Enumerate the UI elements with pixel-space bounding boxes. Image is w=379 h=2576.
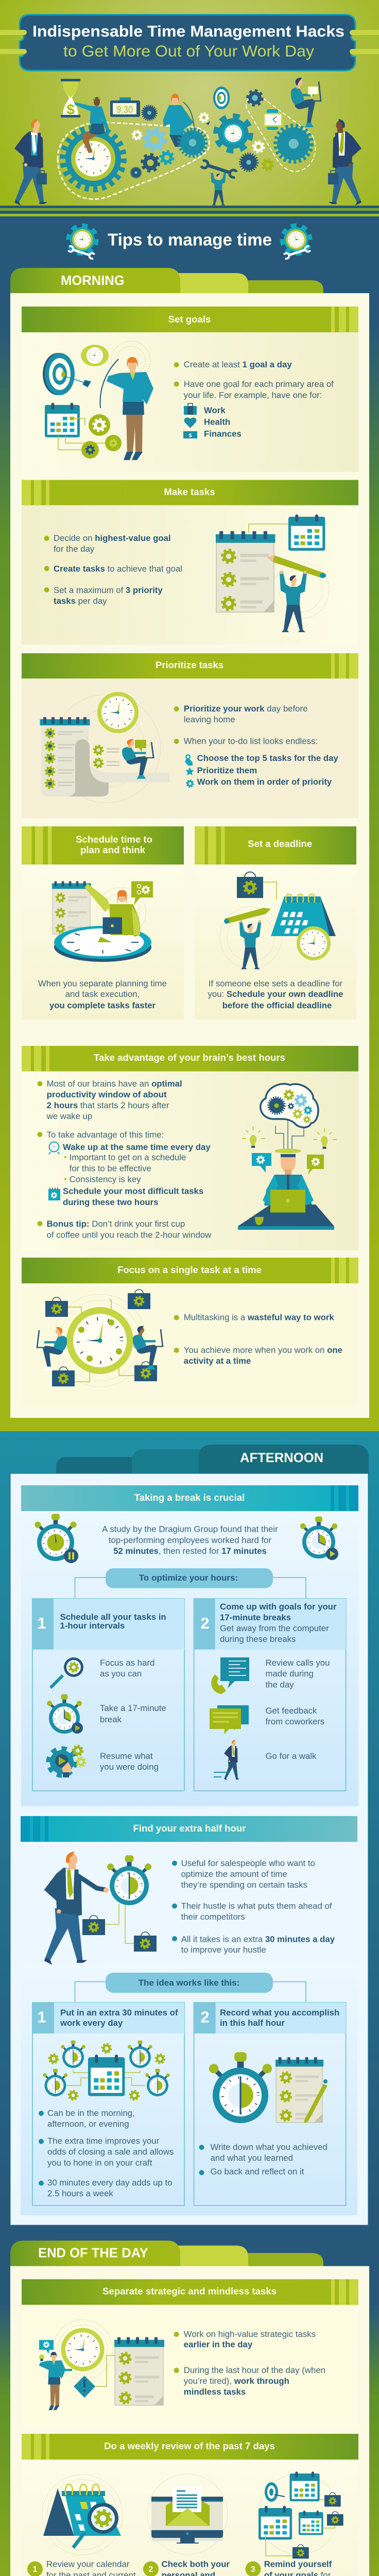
box 1: schedule tasks: 1 — [37, 1614, 46, 1632]
title banner: to Get More Out of Your Work Day — [63, 42, 315, 60]
morning tabs — [10, 268, 323, 293]
icon: finance bill: $ — [189, 433, 192, 439]
heading bar: make tasks: Make tasks — [164, 486, 215, 497]
illustration: businessman, stopwatch and bags — [44, 1852, 157, 1965]
illustration: calendar with stopwatches — [43, 2040, 170, 2100]
heading bar: break: Taking a break is crucial — [134, 1492, 245, 1503]
heading bar: set a deadline: Set a deadline — [248, 838, 312, 849]
illustration: stopwatch gear — [216, 116, 250, 150]
box 2: record accomplishments — [194, 2002, 346, 2206]
illustration: seated woman with hourglass — [74, 97, 109, 153]
step 3 text — [245, 2560, 349, 2576]
text: task bullets: for the day — [54, 544, 95, 554]
title banner — [0, 14, 379, 71]
text: deadline note: before the official deadline — [222, 1001, 332, 1010]
heading bar: focus: Focus on a single task at a time — [117, 1264, 262, 1275]
text: half hour bullets: Their hustle is what puts them ahead of — [181, 1901, 332, 1911]
text: schedule note: you complete tasks faster — [49, 1001, 156, 1010]
illustration: woman on clock with laptop — [52, 881, 153, 962]
illustration: woman, clock, alert and checklist — [39, 2320, 164, 2410]
heading bar: set goals: Set goals — [168, 314, 211, 325]
text: brain bullets: Schedule your most difficult tasks — [63, 1186, 203, 1196]
heading bar: prioritize tasks: Prioritize tasks — [156, 659, 223, 670]
afternoon tabs: AFTERNOON — [240, 1451, 323, 1465]
text: half hour bullets: they’re spending on certain tasks — [181, 1880, 307, 1890]
text: box 2 bullets: Go back and reflect on it — [210, 2167, 304, 2177]
heading bar: half hour — [21, 1816, 357, 1842]
box 1: schedule tasks: Resume what — [100, 1751, 153, 1761]
illustration: hourglass: $ — [66, 101, 75, 117]
panel: brain best hours — [22, 1046, 358, 1250]
panel: separate strategic and mindless tasks — [22, 2279, 358, 2427]
text: brain bullets: Wake up at the same time every day — [63, 1142, 211, 1152]
heading bar: focus — [22, 1258, 358, 1283]
text: focus bullets: You achieve more when you work on one — [184, 1345, 342, 1355]
box 2: record accomplishments: in this half hour — [220, 2018, 285, 2028]
text: task bullets: Create tasks to achieve that goal — [54, 564, 182, 574]
afternoon panel — [10, 1473, 368, 2225]
heading bar: separate tasks — [22, 2279, 358, 2305]
title banner: Indispensable Time Management Hacks — [32, 23, 344, 40]
text: goal bullets — [174, 360, 334, 439]
box 2: goals for breaks: Review calls you — [266, 1658, 330, 1668]
icon: stopwatch — [47, 1694, 83, 1734]
pill: to optimize your hours: To optimize your hours: — [139, 1573, 238, 1583]
illustration: brain, head and laptop — [238, 1084, 337, 1230]
text: box 1 bullets: 2.5 hours a week — [47, 2189, 113, 2198]
illustration: digital clock — [110, 97, 140, 117]
text: brain bullets — [37, 1079, 212, 1240]
pill: to optimize your hours — [75, 1568, 306, 1598]
text: focus bullets: Multitasking is a wasteful way to work — [184, 1313, 334, 1323]
box 1: schedule tasks: Focus as hard — [100, 1658, 154, 1668]
box 2: record accomplishments: Record what you accomplish — [220, 2008, 339, 2018]
box 1: extra 30 minutes: 1 — [37, 2008, 46, 2026]
text: separate tasks bullets — [174, 2329, 325, 2397]
illustration: small gears — [131, 91, 312, 178]
icon: gear with play button — [48, 1745, 85, 1777]
text: task bullets: Decide on highest-value goal — [54, 533, 171, 543]
step 2 text: Check both your — [162, 2560, 230, 2569]
illustration: target and woman archer — [43, 341, 153, 460]
box 2: goals for breaks: from coworkers — [266, 1717, 324, 1726]
box 1: schedule tasks: Take a 17-minute — [100, 1703, 166, 1713]
box 2: goals for breaks: made during — [266, 1669, 314, 1679]
box 2: goals for breaks: Go for a walk — [266, 1751, 317, 1761]
end of the day section background — [0, 2236, 379, 2576]
text: prioritize bullets: Choose the top 5 tasks for the day — [197, 753, 338, 763]
text: separate tasks bullets: you’re tired), work through — [184, 2376, 289, 2386]
heading bar: weekly review — [22, 2434, 358, 2460]
panel: focus on a single task — [22, 1258, 358, 1406]
morning panel — [10, 293, 369, 1418]
text: brain bullets: Important to get on a schedule — [70, 1153, 186, 1162]
text: box 1 bullets: you to hone in on your craft — [47, 2158, 152, 2168]
text: box 1 bullets — [39, 2108, 174, 2198]
illustration: monitor with email — [147, 2474, 228, 2554]
illustration: man lifting wrench — [201, 160, 237, 206]
text: goal bullets: Health — [204, 417, 230, 427]
header section — [0, 0, 379, 216]
pill: the idea works like this: The idea works like this: — [139, 1978, 239, 1988]
text: half hour bullets: to improve your hustle — [181, 1945, 266, 1955]
box 2: record accomplishments: 2 — [200, 2008, 210, 2026]
box 1: schedule tasks: break — [100, 1715, 122, 1724]
box 2: goals for breaks: Get feedback — [266, 1706, 317, 1716]
step 1 text: Review your calendar — [46, 2560, 130, 2569]
text: prioritize bullets: Prioritize them — [197, 766, 257, 775]
text: study: top-performing employees worked hard for — [109, 1535, 272, 1545]
text: brain bullets: productivity window of about — [47, 1090, 167, 1099]
icon: star — [185, 767, 194, 775]
text: study — [102, 1524, 278, 1556]
illustration: wrist clock — [263, 109, 283, 130]
text: separate tasks bullets: earlier in the day — [184, 2340, 253, 2349]
text: focus bullets — [174, 1313, 342, 1366]
text: half hour bullets: their competitors — [181, 1912, 245, 1922]
illustration: hourglass — [61, 79, 80, 117]
end of day tabs — [10, 2241, 323, 2266]
text: task bullets: tasks per day — [54, 596, 107, 606]
icon: phone and list — [211, 1657, 249, 1694]
illustration: archer woman — [163, 94, 194, 147]
illustration: scroll list with clock and man — [40, 692, 169, 803]
heading bar: make tasks — [22, 480, 358, 505]
heading: tips to manage time: Tips to manage time — [108, 230, 272, 249]
box 1: extra 30 minutes: Put in an extra 30 minutes of — [60, 2008, 178, 2018]
box 1: schedule tasks — [32, 1598, 184, 1791]
panel: set a deadline — [195, 826, 356, 1020]
text: brain bullets: Bonus tip: Don’t drink your first cup — [47, 1219, 185, 1229]
heading bar: set goals — [22, 307, 358, 332]
icon: alarm clock — [48, 1142, 60, 1154]
morning section background — [0, 216, 379, 1431]
illustration: big clock, bags and two workers — [37, 1290, 163, 1387]
text: half hour bullets: optimize the amount of time — [181, 1869, 287, 1879]
text: focus bullets: activity at a time — [184, 1356, 251, 1366]
illustration: left businessman — [14, 119, 47, 206]
text: task bullets — [44, 533, 182, 606]
panel: set goals — [22, 307, 358, 472]
illustration: right businessman — [328, 119, 361, 206]
text: half hour bullets: All it takes is an extra 30 minutes a day — [181, 1934, 335, 1944]
text: goal bullets: Work — [204, 405, 226, 415]
text: brain bullets: we wake up — [46, 1111, 92, 1121]
text: prioritize bullets: Work on them in order of priority — [197, 777, 332, 787]
text: brain bullets: Most of our brains have an optimal — [47, 1079, 182, 1089]
illustration: dashed belts — [58, 96, 315, 199]
text: brain bullets: of coffee until you reach the 2-hour window — [47, 1230, 212, 1240]
icon: gear — [186, 780, 194, 787]
text: prioritize bullets: When your to-do list looks endless: — [184, 736, 318, 746]
text: deadline note: you: Schedule your own deadline — [208, 989, 343, 999]
text: brain bullets: Consistency is key — [70, 1175, 141, 1184]
box 2: goals for breaks: 2 — [200, 1614, 210, 1632]
icon: chat bubbles — [210, 1705, 249, 1734]
panel: weekly review — [22, 2434, 358, 2576]
panel: make tasks — [22, 480, 358, 645]
text: half hour bullets: Useful for salespeople who want to — [181, 1858, 315, 1868]
text: goal bullets: Have one goal for each primary area of — [184, 379, 334, 389]
text: goal bullets: Finances — [204, 429, 242, 438]
icon: walking man — [214, 1740, 239, 1781]
illustration: big clock gear — [63, 129, 123, 189]
illustration: target — [206, 87, 230, 125]
text: study: 52 minutes, then rested for 17 minutes — [113, 1546, 267, 1556]
heading bar: half hour: Find your extra half hour — [133, 1823, 246, 1834]
heading bar: schedule time — [22, 826, 184, 865]
heading bar: brain best hours — [22, 1046, 358, 1072]
illustration: digital clock: 9:30 — [116, 105, 133, 115]
illustration: three calendars with bags — [259, 2471, 343, 2558]
text: brain bullets: for this to be effective — [70, 1164, 151, 1174]
icon: work briefcase — [184, 403, 197, 415]
pill: the idea works like this — [75, 1973, 306, 2002]
box 1: schedule tasks: as you can — [100, 1669, 142, 1679]
illustration: tent calendar with magnifier — [42, 2475, 123, 2555]
icon: health heart — [184, 418, 196, 428]
box 2: goals for breaks: the day — [266, 1680, 294, 1690]
text: brain bullets: 2 hours that starts 2 hours after — [47, 1100, 169, 1110]
panel: schedule time to plan and think — [22, 826, 184, 1020]
box 2: goals for breaks — [194, 1598, 346, 1791]
text: box 1 bullets: The extra time improves your — [47, 2136, 160, 2146]
text: prioritize bullets: Prioritize your work day before — [184, 704, 307, 714]
illustration: stopwatch and checklist — [209, 2052, 328, 2123]
step 2 text — [143, 2560, 254, 2576]
text: separate tasks bullets: During the last hour of the day (when — [184, 2365, 325, 2375]
text: box 1 bullets: 30 minutes every day adds up to — [47, 2178, 173, 2188]
heading bar: separate tasks: Separate strategic and mindless tasks — [102, 2285, 277, 2297]
text: brain bullets: To take advantage of this time: — [47, 1130, 164, 1140]
step 2 text: 2 — [149, 2565, 153, 2574]
icon: stopwatch with pause — [35, 1514, 78, 1563]
box 1: extra 30 minutes: work every day — [60, 2018, 123, 2028]
icon: stopwatch with play — [300, 1516, 338, 1560]
heading bar: prioritize tasks — [22, 653, 358, 679]
illustration: checklist, calendar, man with pencil — [216, 515, 329, 632]
text: box 1 bullets: odds of closing a sale and allows — [47, 2147, 174, 2157]
panel: prioritize tasks — [22, 653, 358, 818]
end of day panel — [10, 2266, 369, 2576]
icon: finance bill — [183, 431, 197, 439]
step 3 text: 3 — [251, 2565, 255, 2574]
panel: taking a break — [21, 1485, 358, 1806]
panel: find your extra half hour — [21, 1816, 357, 2206]
heading: tips to manage time — [68, 226, 311, 259]
step 1 text — [27, 2560, 136, 2576]
morning tabs: MORNING — [61, 274, 125, 288]
text: deadline note — [208, 979, 343, 1010]
afternoon tabs — [56, 1445, 369, 1473]
step 1 text: 1 — [33, 2565, 38, 2574]
heading bar: break — [21, 1485, 358, 1511]
text: schedule note — [38, 979, 167, 1010]
end of day tabs: END OF THE DAY — [38, 2246, 148, 2261]
text: box 2 bullets: and what you learned — [210, 2153, 293, 2163]
text: prioritize bullets — [174, 704, 338, 787]
text: goal bullets: your life. For example, have one for: — [184, 391, 322, 400]
text: brain bullets: during these two hours — [63, 1197, 159, 1207]
heading bar: brain best hours: Take advantage of your brain’s best hours — [94, 1052, 285, 1063]
text: deadline note: If someone else sets a deadline for — [209, 979, 343, 989]
step 3 text: Remind yourself — [264, 2560, 332, 2569]
text: box 1 bullets: afternoon, or evening — [47, 2119, 129, 2129]
heading bar: schedule time: plan and think — [80, 844, 146, 855]
illustration: man on laptop — [291, 78, 321, 127]
text: box 2 bullets — [199, 2142, 328, 2177]
box 1: extra 30 minutes — [32, 2002, 184, 2206]
illustration: calendar tent, man with pencil, clock — [220, 872, 336, 969]
heading bar: weekly review: Do a weekly review of the past 7 days — [104, 2441, 275, 2451]
text: half hour bullets — [172, 1858, 335, 1955]
box 1: schedule tasks: Schedule all your tasks in — [60, 1612, 166, 1622]
box 2: goals for breaks: during these breaks — [220, 1634, 296, 1644]
box 1: schedule tasks: you were doing — [100, 1762, 159, 1772]
heading bar: schedule time: Schedule time to — [76, 834, 152, 844]
heading bar: set a deadline — [195, 826, 356, 865]
text: goal bullets: Create at least 1 goal a day — [184, 360, 292, 369]
text: box 2 bullets: Write down what you achieved — [210, 2142, 328, 2152]
panel: idea section backdrop — [21, 1965, 357, 2215]
text: separate tasks bullets: mindless tasks — [184, 2387, 246, 2397]
box 2: goals for breaks: Come up with goals for your — [220, 1602, 337, 1612]
text: schedule note: When you separate planning time — [38, 979, 167, 989]
afternoon section background — [0, 1431, 379, 2236]
text: study: A study by the Dragium Group found that their — [102, 1524, 278, 1534]
text: task bullets: Set a maximum of 3 priority — [54, 585, 163, 595]
box 1: schedule tasks: 1-hour intervals — [60, 1621, 125, 1631]
text: separate tasks bullets: Work on high-value strategic tasks — [184, 2329, 316, 2339]
text: box 1 bullets: Can be in the morning, — [47, 2108, 135, 2118]
box 2: goals for breaks: 17-minute breaks — [220, 1613, 291, 1622]
text: schedule note: and task execution, — [65, 989, 140, 999]
icon: tap hand — [185, 754, 193, 766]
text: prioritize bullets: leaving home — [184, 715, 235, 724]
icon: calendar — [48, 1188, 60, 1200]
box 2: goals for breaks: Get away from the computer — [220, 1623, 329, 1633]
icon: magnifier — [50, 1657, 83, 1688]
